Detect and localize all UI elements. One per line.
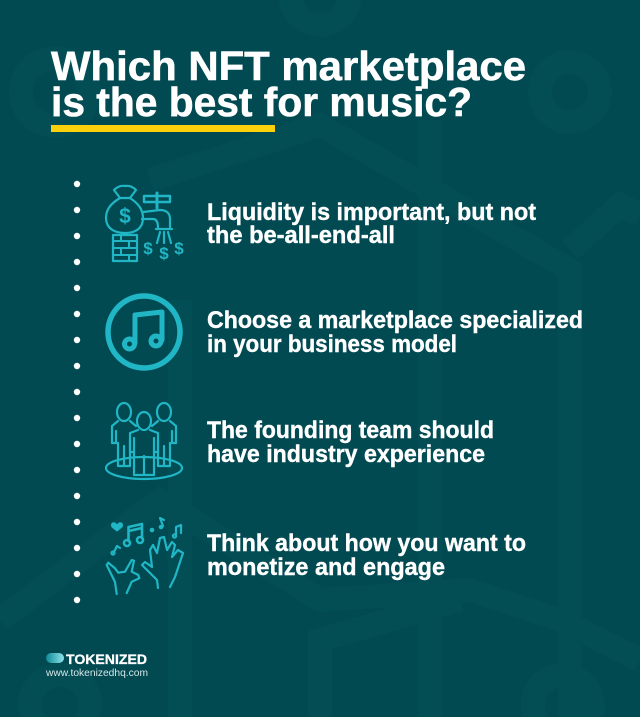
text: liquidity <box>207 199 536 249</box>
text: liquidity: Liquidity is important, but not <box>207 199 536 226</box>
icon: founding team <box>106 403 182 479</box>
logo <box>46 651 147 667</box>
text: monetize and engage <box>207 530 526 581</box>
icon: money bag and tap: $ <box>174 239 184 258</box>
title: Which NFT marketplace <box>51 43 526 89</box>
text: business model <box>207 307 583 358</box>
website url: www.tokenizedhq.com <box>45 667 148 679</box>
title underline <box>51 125 275 132</box>
title <box>51 43 526 125</box>
icon: money bag and tap <box>106 186 184 263</box>
text: monetize and engage: Think about how you want to <box>207 530 526 557</box>
icon: music note in circle <box>108 296 180 368</box>
text: business model: Choose a marketplace specialized <box>207 307 583 334</box>
logo wordmark: TOKENIZED <box>66 651 147 667</box>
title: is the best for music? <box>51 79 472 125</box>
text: liquidity: the be-all-end-all <box>207 222 395 249</box>
text: founding team: The founding team should <box>207 417 494 444</box>
icon: money bag and tap: $ <box>119 205 131 228</box>
icon: hands and music notes <box>107 518 183 594</box>
dotted timeline <box>74 181 80 603</box>
text: monetize and engage: monetize and engage <box>207 554 445 581</box>
logo mark <box>46 653 64 663</box>
text: business model: in your business model <box>207 331 457 358</box>
icon: money bag and tap: $ <box>143 239 153 258</box>
text: founding team <box>207 417 494 468</box>
icon: money bag and tap: $ <box>159 244 169 263</box>
text: founding team: have industry experience <box>207 441 485 468</box>
